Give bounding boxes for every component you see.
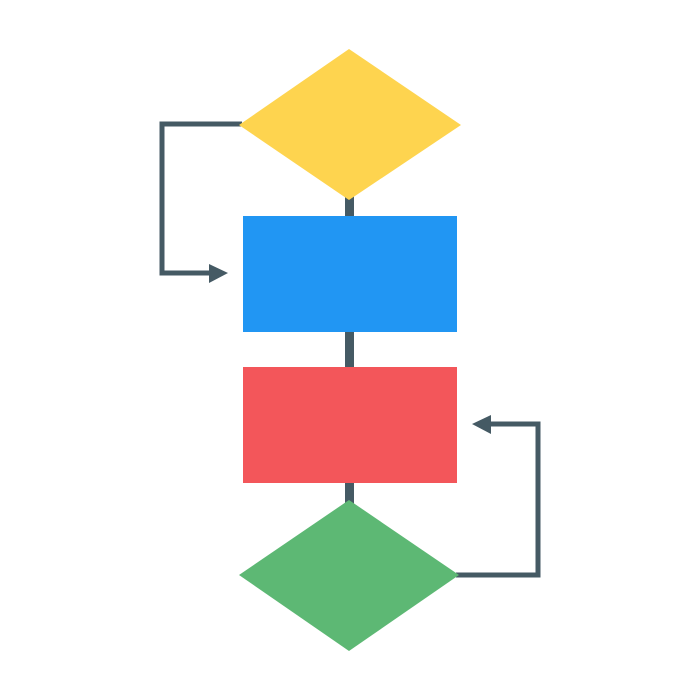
arrow: left loop from top diamond to blue box — [162, 124, 242, 283]
connector: vertical spine — [345, 195, 354, 505]
yellow decision diamond — [239, 49, 461, 200]
blue process box — [243, 216, 457, 332]
arrow: right loop from bottom diamond to red box — [456, 415, 538, 575]
green decision diamond — [239, 500, 459, 651]
red process box — [243, 367, 457, 483]
